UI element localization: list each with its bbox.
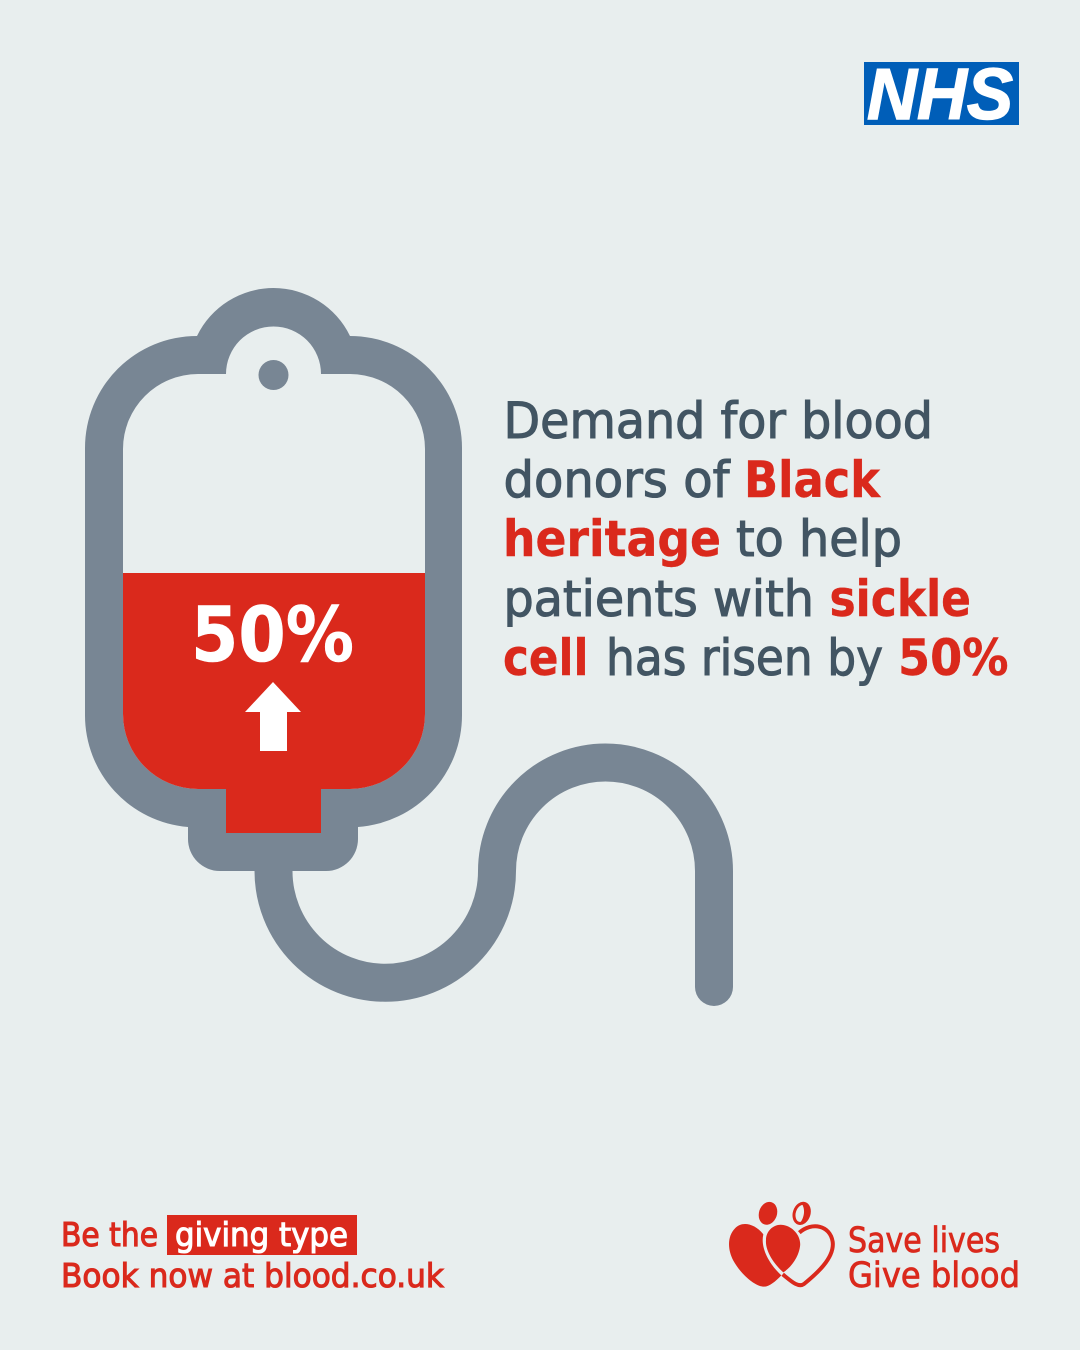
tagline: Save lives Give blood: Give blood	[848, 1256, 1020, 1296]
headline text	[503, 392, 1008, 687]
campaign line: Be the giving type: Be the	[61, 1215, 158, 1254]
headline text: cell	[503, 629, 588, 687]
campaign line: Be the giving type	[61, 1215, 357, 1255]
icon: up arrow	[245, 682, 301, 751]
tagline: Save lives Give blood	[848, 1221, 1020, 1296]
headline text: to help	[736, 510, 902, 568]
headline text: donors of	[504, 451, 731, 509]
icon: blood bag tube	[274, 762, 714, 987]
headline text: Black	[744, 451, 882, 509]
headline text: 50%	[898, 629, 1008, 687]
logo: Give Blood hearts	[729, 1199, 833, 1287]
bag figure: 50%: 50%	[191, 590, 354, 679]
blood fill	[123, 573, 425, 833]
call to action: book now: Book now at blood.co.uk	[61, 1256, 445, 1295]
headline text: heritage	[503, 510, 721, 568]
headline text: has risen by	[606, 629, 883, 687]
tagline: Save lives Give blood: Save lives	[848, 1221, 1000, 1261]
campaign line: Be the giving type: giving type	[175, 1215, 348, 1254]
icon: blood bag	[85, 288, 462, 871]
logo: NHS: NHS	[867, 55, 1013, 135]
headline text: Demand for blood	[504, 392, 933, 450]
headline text: sickle	[830, 570, 971, 628]
headline text: patients with	[504, 570, 814, 628]
